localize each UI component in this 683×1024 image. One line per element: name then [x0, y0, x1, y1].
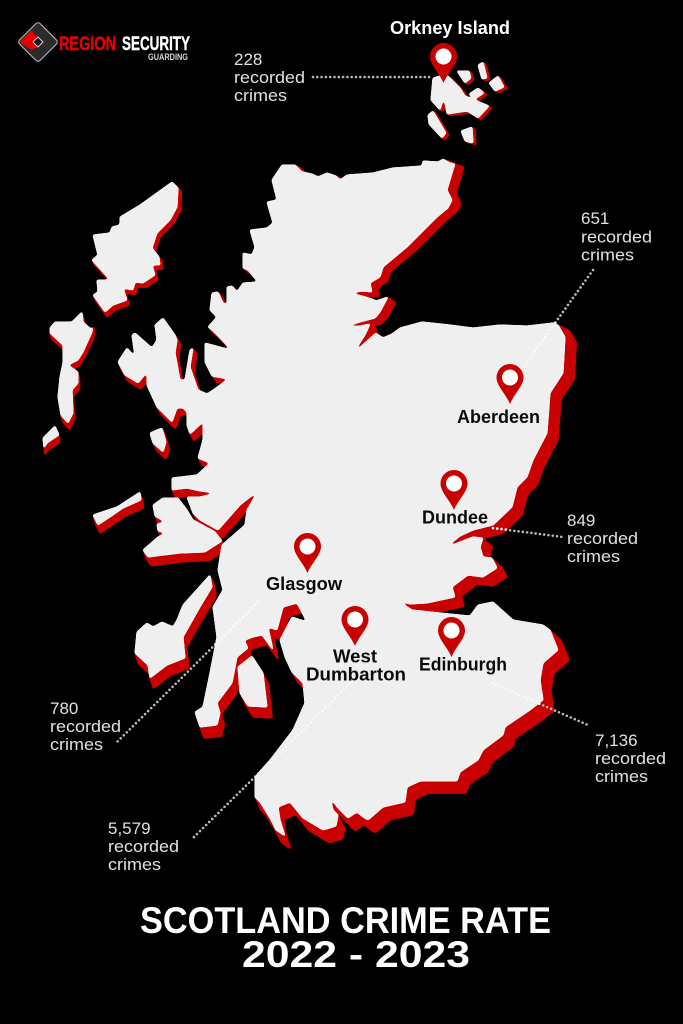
location: Edinburgh: Edinburgh — [419, 654, 507, 674]
callout: Aberdeen 651 — [581, 209, 652, 264]
location: Edinburgh — [419, 617, 507, 674]
callout: West Dumbarton 5,579: recorded — [108, 837, 179, 856]
logo: SECURITY — [122, 34, 190, 55]
callout: Glasgow 780: recorded — [50, 717, 121, 736]
logo: GUARDING — [148, 52, 188, 62]
logo — [17, 21, 190, 63]
location: Aberdeen: Aberdeen — [457, 407, 540, 427]
callout: West Dumbarton 5,579: crimes — [108, 855, 161, 874]
callout: West Dumbarton 5,579 — [108, 819, 179, 874]
location: Dundee — [422, 470, 488, 528]
location: Dundee: Dundee — [422, 508, 488, 528]
callout: Orkney 228: 228 — [234, 50, 262, 69]
callout: Orkney 228: recorded — [234, 68, 305, 87]
callout: Glasgow 780 — [50, 699, 121, 754]
logo: REGION — [59, 34, 116, 55]
location: Glasgow — [266, 533, 343, 594]
location: West Dumbarton — [306, 606, 406, 684]
title: SCOTLAND CRIME RATE — [140, 900, 551, 941]
title: 2022 - 2023 — [242, 934, 470, 975]
location: West Dumbarton: Dumbarton — [306, 664, 406, 684]
location: Orkney Island: Orkney Island — [390, 18, 510, 38]
callout: Dundee 849: recorded — [567, 529, 638, 548]
callout: Edinburgh 7,136 — [595, 731, 666, 786]
location: Glasgow: Glasgow — [266, 574, 343, 594]
location: West Dumbarton: West — [333, 646, 377, 666]
dotted leader lines over land — [213, 323, 555, 765]
callout: Orkney 228: crimes — [234, 86, 287, 105]
callout: Edinburgh 7,136: crimes — [595, 767, 648, 786]
callout: Aberdeen 651: crimes — [581, 246, 634, 264]
location: Aberdeen — [457, 364, 540, 427]
map of Scotland: land surface — [43, 62, 565, 836]
location: Orkney Island — [390, 18, 510, 83]
callout: Edinburgh 7,136: recorded — [595, 749, 666, 768]
callout: Glasgow 780: 780 — [50, 699, 78, 718]
dotted leader lines over sea — [117, 77, 593, 838]
callout: Dundee 849: crimes — [567, 547, 620, 566]
callout: Aberdeen 651: 651 — [581, 209, 609, 228]
title — [140, 900, 551, 975]
callout: Orkney 228 — [234, 50, 305, 105]
callout: Edinburgh 7,136: 7,136 — [595, 731, 638, 750]
callout: Dundee 849: 849 — [567, 511, 595, 530]
callout: West Dumbarton 5,579: 5,579 — [108, 819, 151, 838]
map extrusion: red depth layer — [43, 63, 576, 849]
callout: Glasgow 780: crimes — [50, 735, 103, 754]
callout: Aberdeen 651: recorded — [581, 228, 652, 246]
callout: Dundee 849 — [567, 511, 638, 566]
